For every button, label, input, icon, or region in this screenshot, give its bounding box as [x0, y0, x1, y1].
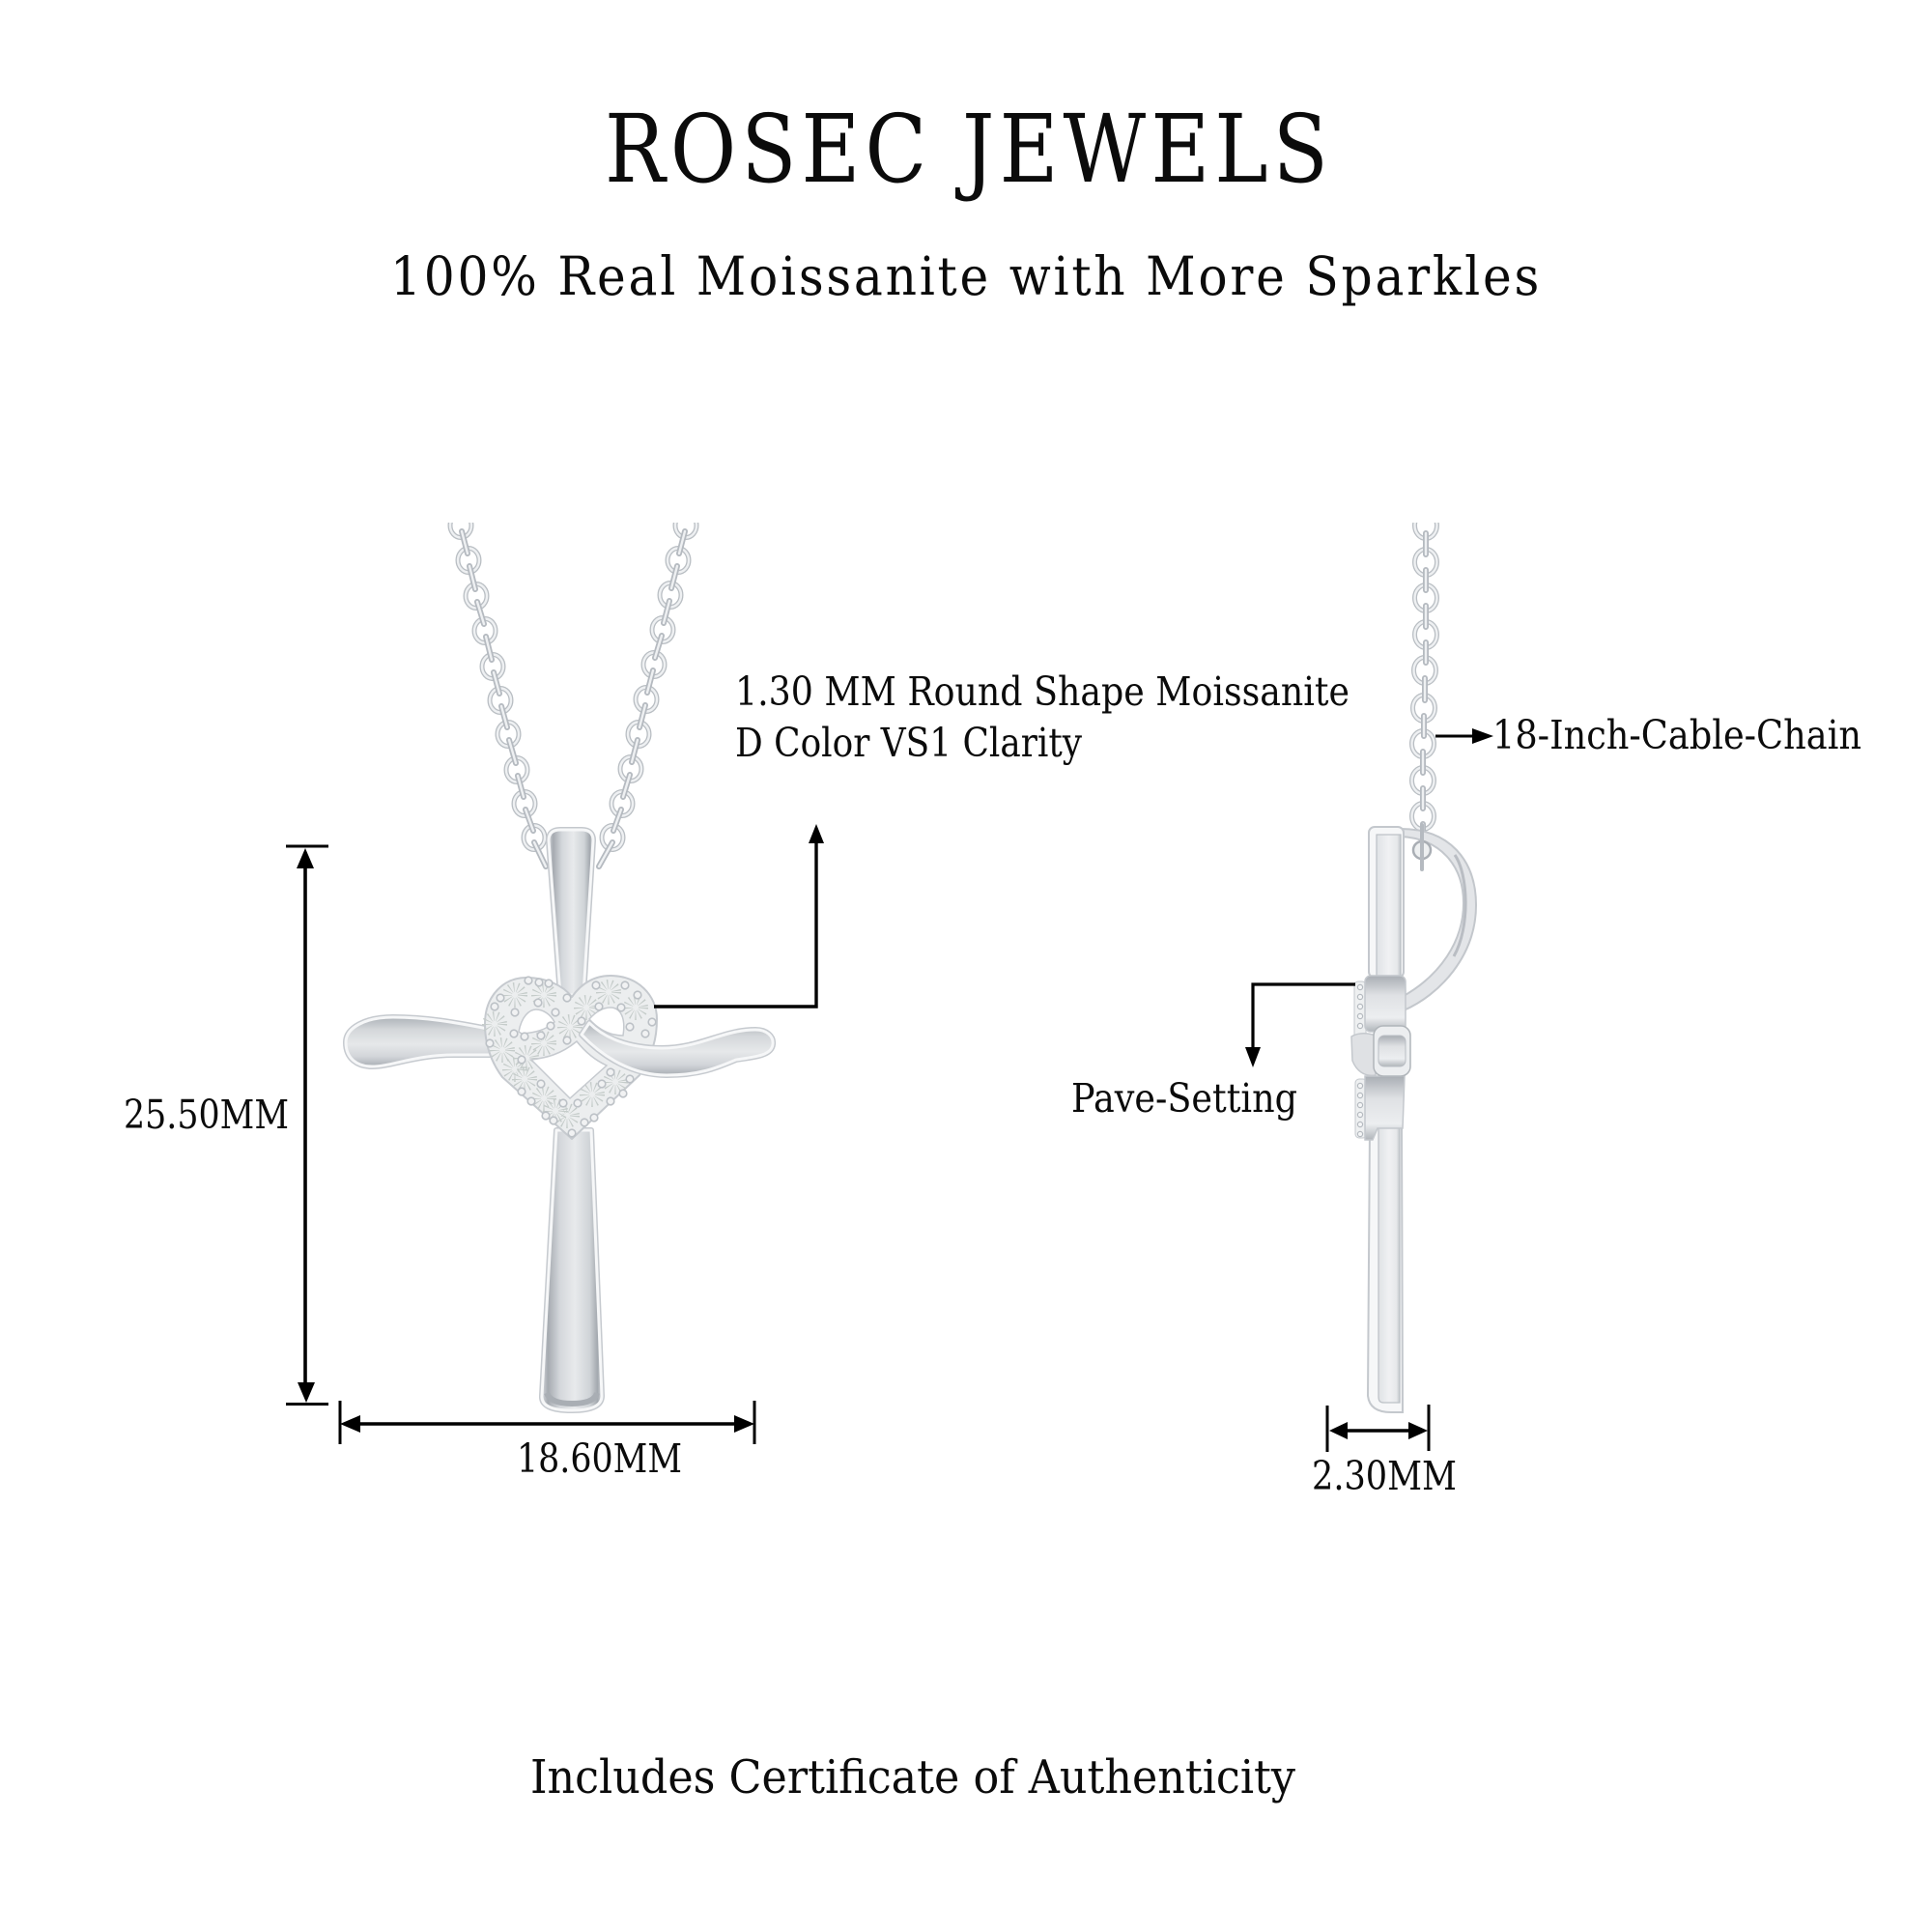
side bail	[1401, 829, 1476, 1010]
callout text: moissanite spec	[735, 668, 1350, 766]
thickness label: 2.30MM	[1312, 1453, 1457, 1499]
right arm	[582, 1023, 773, 1075]
heart with moissanite pave	[485, 976, 657, 1139]
cross upper bar	[549, 830, 593, 995]
side pave stones	[1354, 981, 1367, 1138]
side chain	[1412, 512, 1437, 850]
height dimension arrow	[286, 846, 328, 1405]
side view pendant	[1351, 512, 1476, 1412]
pave setting label: Pave-Setting	[1071, 1075, 1297, 1122]
chain label: 18-Inch-Cable-Chain	[1492, 712, 1861, 758]
pave setting arrow	[1245, 984, 1355, 1067]
thickness dimension arrow	[1327, 1405, 1429, 1452]
height label: 25.50MM	[124, 1092, 289, 1138]
heart openings	[519, 1008, 624, 1098]
heart stones	[487, 984, 643, 1123]
callout text: moissanite spec: D Color VS1 Clarity	[735, 720, 1083, 766]
left arm	[346, 1017, 497, 1066]
jump ring	[1413, 825, 1431, 869]
chain arrow	[1435, 728, 1493, 744]
callout: moissanite arrow	[654, 824, 824, 1007]
subtitle: 100% Real Moissanite with More Sparkles	[390, 245, 1542, 307]
side lower bar	[1368, 1125, 1403, 1412]
width label: 18.60MM	[517, 1435, 682, 1482]
side centre block	[1351, 976, 1410, 1140]
width dimension arrow	[340, 1401, 754, 1444]
title: ROSEC JEWELS	[605, 95, 1333, 204]
certificate note: Includes Certificate of Authenticity	[530, 1750, 1295, 1804]
cross lower bar	[542, 1130, 602, 1410]
front view pendant	[346, 514, 773, 1410]
front chain	[450, 514, 696, 867]
heart beads	[486, 977, 656, 1137]
side upper bar	[1369, 827, 1404, 978]
callout text: moissanite spec: 1.30 MM Round Shape Moissanite	[735, 668, 1350, 715]
